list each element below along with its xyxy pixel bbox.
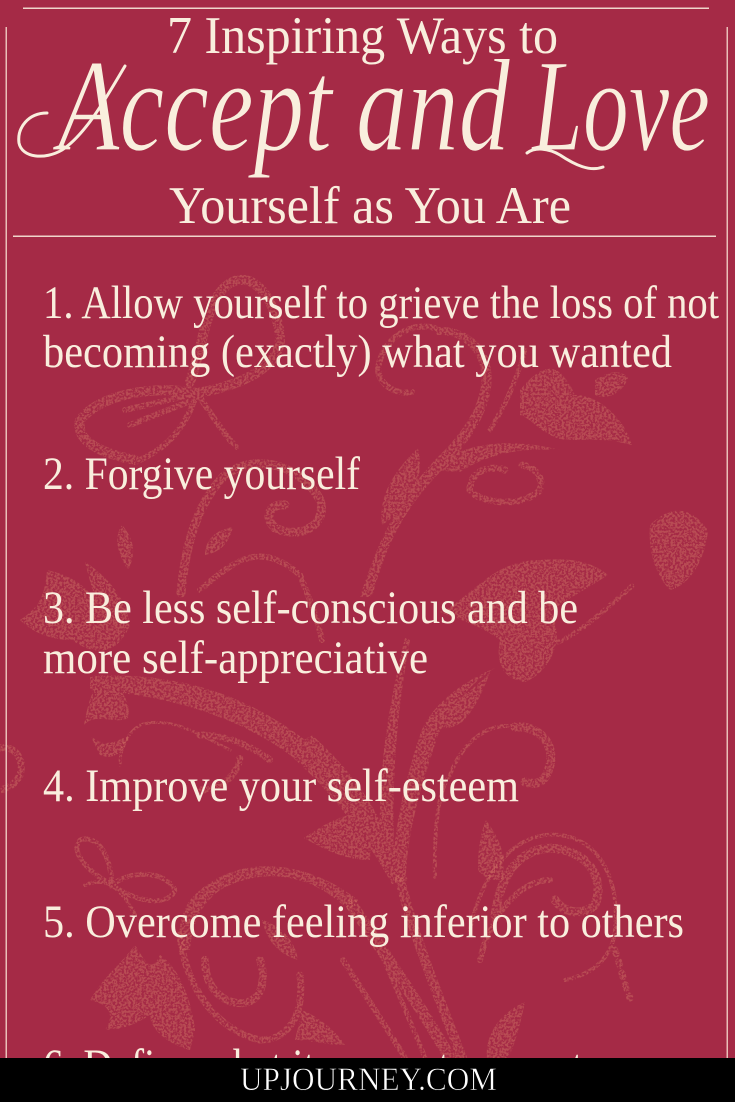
item 5: 5. Overcome feeling inferior to others — [43, 896, 684, 948]
item 2: 2. Forgive yourself — [43, 448, 360, 500]
bottom splayed stem strands — [352, 905, 450, 1058]
item 3 — [43, 582, 578, 684]
item 6, cut off by footer: 6. Define what it means to accept — [43, 1040, 583, 1092]
lower curls — [180, 935, 301, 1040]
swirl under forgive — [181, 464, 321, 593]
floral background illustration — [0, 280, 708, 1058]
top rule — [23, 8, 709, 9]
title script line: and — [356, 32, 511, 179]
item 4: 4. Improve your self-esteem — [43, 760, 519, 812]
item 1: becoming (exactly) what you wanted — [43, 326, 672, 378]
title bottom rule — [13, 236, 716, 237]
title line 3: Yourself as You Are — [169, 177, 571, 235]
title script line: Accept — [52, 32, 335, 179]
footer website text: UPJOURNEY.COM — [240, 1062, 497, 1098]
thin arc right — [435, 726, 515, 877]
leaf tendril left — [120, 722, 230, 765]
item 3: 3. Be less self-conscious and be — [43, 582, 578, 634]
footer bar — [0, 1058, 735, 1102]
right swirl — [495, 848, 598, 915]
butterfly top left — [190, 280, 280, 393]
butterfly lower left — [77, 839, 175, 901]
title line 1: 7 Inspiring Ways to — [167, 7, 558, 65]
item 1 — [43, 277, 719, 378]
branch dotted spiral — [470, 465, 541, 502]
title script line — [19, 32, 710, 179]
central stem curl — [378, 326, 435, 393]
edge curl — [0, 748, 21, 790]
item 3: more self-appreciative — [43, 632, 428, 684]
